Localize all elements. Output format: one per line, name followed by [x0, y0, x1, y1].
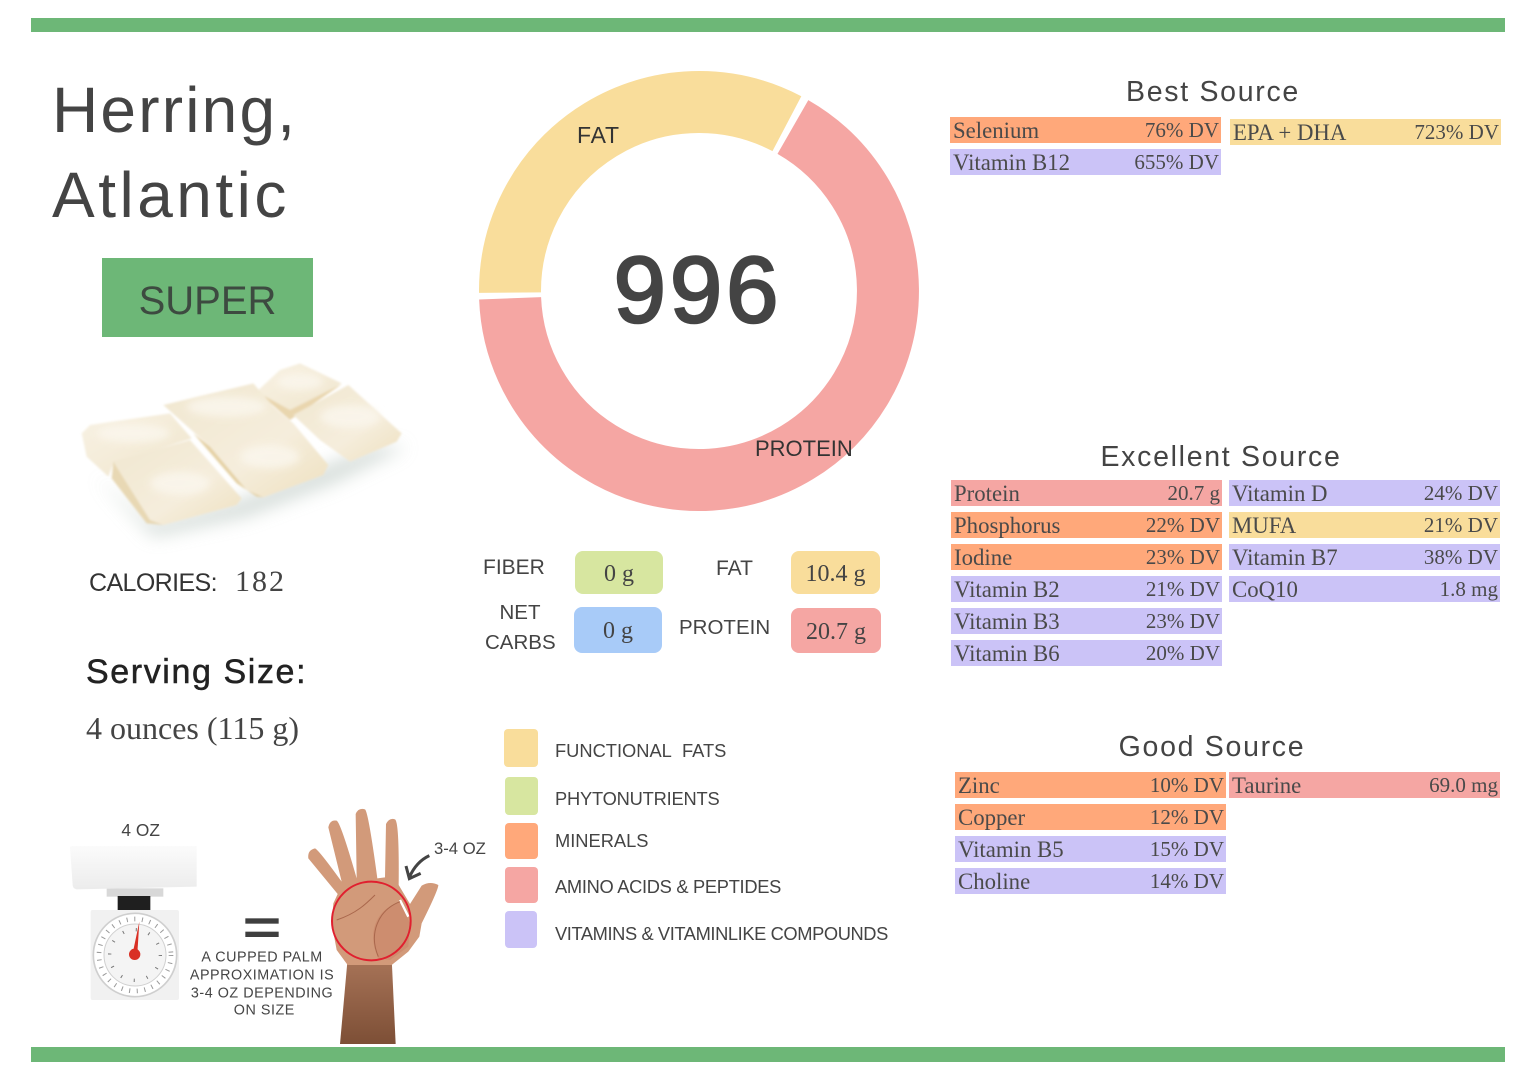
net carbs label [485, 601, 556, 654]
row: iodine: 23% DV [1146, 545, 1220, 569]
row: selenium: 76% DV [1145, 118, 1219, 142]
net carbs label: NET [500, 601, 540, 624]
row: copper [955, 804, 1226, 830]
heading: best source: Best Source [1126, 76, 1300, 108]
net carbs value [574, 607, 662, 653]
row: vitamin b2: 21% DV [1146, 577, 1220, 601]
serving size value: 4 ounces (115 g) [86, 710, 299, 746]
swatch: functional fats [504, 729, 538, 767]
illustration: scale and palm comparison [71, 808, 486, 1044]
row: zinc: 10% DV [1150, 773, 1224, 797]
caption: A CUPPED PALM [201, 950, 323, 966]
row: phosphorus [951, 512, 1222, 538]
label: 4 oz: 4 OZ [121, 820, 160, 840]
label: fat: FAT [577, 122, 620, 148]
title: Atlantic [52, 159, 290, 231]
segment: fat [510, 102, 787, 293]
calories: CALORIES: 182 [89, 565, 286, 598]
row: choline: 14% DV [1150, 869, 1224, 893]
legend text: functional fats: FUNCTIONAL FATS [555, 740, 726, 761]
row: vitamin d [1229, 480, 1500, 506]
row: vitamin b3: 23% DV [1146, 609, 1220, 633]
row: protein [951, 480, 1222, 506]
row: taurine [1229, 772, 1500, 798]
row: iodine [951, 544, 1222, 570]
fillet: middle [163, 383, 328, 497]
row: vitamin b6 [951, 640, 1222, 666]
badge: super: SUPER [139, 279, 276, 323]
row: vitamin b5: Vitamin B5 [958, 837, 1064, 862]
row: vitamin b6: 20% DV [1146, 641, 1220, 665]
row: vitamin b12 [950, 149, 1221, 175]
row: vitamin b2: Vitamin B2 [954, 577, 1060, 602]
heading: good source: Good Source [1119, 731, 1305, 763]
row: vitamin d: Vitamin D [1232, 481, 1328, 506]
fiber value [575, 551, 663, 594]
row: iodine: Iodine [954, 545, 1012, 570]
swatch: amino acids [505, 867, 538, 903]
fat value: 10.4 g [806, 561, 866, 587]
row: vitamin b12: Vitamin B12 [953, 150, 1070, 175]
fiber value: 0 g [604, 561, 634, 587]
row: epa + dha: EPA + DHA [1233, 120, 1346, 145]
donut chart [479, 71, 919, 511]
net carbs value: 0 g [603, 618, 633, 644]
caption: APPROXIMATION IS [190, 968, 334, 984]
row: vitamin b5 [955, 836, 1226, 862]
title [52, 74, 297, 231]
fiber label: FIBER [483, 556, 545, 579]
image: herring fillets [82, 363, 402, 542]
fish highlights [97, 373, 380, 495]
row: coq10: 1.8 mg [1440, 577, 1498, 601]
row: vitamin b7: Vitamin B7 [1232, 545, 1338, 570]
row: copper: Copper [958, 805, 1025, 830]
row: phosphorus: Phosphorus [954, 513, 1060, 538]
serving size heading: Serving Size: [86, 653, 307, 691]
fillet: left [82, 413, 192, 477]
macro: net carbs [485, 601, 662, 654]
row: selenium: Selenium [953, 118, 1039, 143]
net carbs label: CARBS [485, 631, 556, 654]
swatch: vitamins [505, 911, 537, 948]
row: mufa [1229, 512, 1500, 538]
label and arrow: 3-4 oz [406, 839, 486, 879]
label: protein: PROTEIN [755, 436, 853, 461]
protein value: 20.7 g [806, 619, 866, 645]
row: epa + dha [1230, 119, 1501, 145]
title: Herring, [52, 74, 297, 146]
row: vitamin b6: Vitamin B6 [954, 641, 1060, 666]
row: vitamin b3: Vitamin B3 [954, 609, 1060, 634]
label and arrow: 3-4 oz: 3-4 OZ [434, 839, 486, 858]
row: vitamin b2 [951, 576, 1222, 602]
row: vitamin b3 [951, 608, 1222, 634]
row: mufa: 21% DV [1424, 513, 1498, 537]
legend text: phytonutrients: PHYTONUTRIENTS [555, 788, 719, 809]
legend text: minerals: MINERALS [555, 830, 648, 851]
caption: ON SIZE [234, 1002, 295, 1018]
row: zinc: Zinc [958, 773, 1000, 798]
icon: equals sign [245, 918, 279, 937]
top bar [31, 18, 1505, 32]
row: vitamin b7: 38% DV [1424, 545, 1498, 569]
row: coq10: CoQ10 [1232, 577, 1298, 602]
row: zinc [955, 772, 1226, 798]
bottom bar [31, 1047, 1505, 1062]
row: vitamin b7 [1229, 544, 1500, 570]
heading: excellent source: Excellent Source [1100, 441, 1342, 473]
total score: 996 [614, 237, 782, 342]
row: coq10 [1229, 576, 1500, 602]
row: vitamin b5: 15% DV [1150, 837, 1224, 861]
fillet: back right [257, 363, 342, 415]
macro: fat [716, 551, 880, 594]
macro: fiber [483, 551, 663, 594]
icon: hand [308, 809, 438, 1044]
row: copper: 12% DV [1150, 805, 1224, 829]
caption: 3-4 OZ DEPENDING [191, 986, 333, 1002]
swatch: phytonutrients [505, 777, 538, 815]
row: taurine: 69.0 mg [1429, 773, 1498, 797]
icon: scale [70, 846, 197, 1000]
swatch: minerals [505, 823, 538, 859]
legend text: vitamins and vitaminlike compounds: VITAMINS & VITAMINLIKE COMPOUNDS [555, 923, 888, 944]
row: taurine: Taurine [1232, 773, 1301, 798]
fat value [791, 551, 880, 594]
segment: protein [510, 127, 888, 480]
protein value [791, 608, 881, 653]
protein label: PROTEIN [679, 616, 770, 639]
badge: super [102, 258, 313, 337]
row: protein: 20.7 g [1168, 481, 1220, 505]
row: phosphorus: 22% DV [1146, 513, 1220, 537]
row: choline: Choline [958, 869, 1030, 894]
shadow [97, 447, 407, 537]
row: mufa: MUFA [1232, 513, 1296, 538]
fat label: FAT [716, 557, 753, 580]
row: choline [955, 868, 1226, 894]
row: vitamin b12: 655% DV [1134, 150, 1219, 174]
legend [504, 729, 538, 948]
macro: protein [679, 608, 881, 653]
legend text: amino acids and peptides: AMINO ACIDS & PEPTIDES [555, 876, 781, 897]
row: protein: Protein [954, 481, 1020, 506]
row: selenium [950, 117, 1221, 143]
row: epa + dha: 723% DV [1414, 120, 1499, 144]
row: vitamin d: 24% DV [1424, 481, 1498, 505]
